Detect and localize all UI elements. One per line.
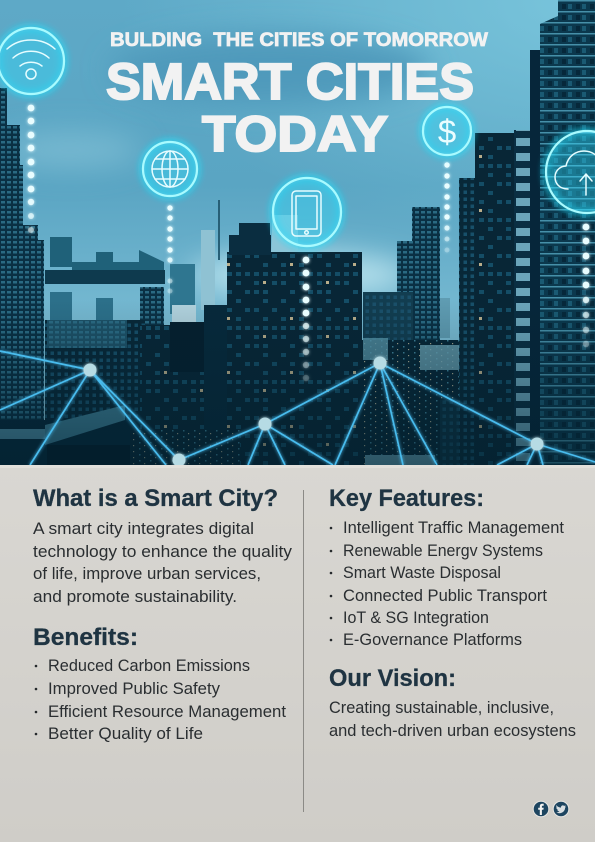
section: what is a smart city <box>33 485 293 606</box>
bullet list <box>35 657 286 743</box>
bullet list: Intelligent Traffic Management <box>343 519 564 537</box>
info panel <box>0 465 595 842</box>
section: benefits <box>33 624 286 743</box>
network lines and nodes <box>0 351 595 466</box>
bullet list: Better Quality of Life <box>48 725 203 743</box>
bullet list: Smart Waste Disposal <box>343 564 501 582</box>
paragraph: A smart city integrates digital <box>33 520 254 538</box>
paragraph <box>329 699 576 740</box>
section: our vision <box>329 665 576 740</box>
heading: Our Vision: <box>329 665 456 692</box>
icon: dollar: $ <box>438 113 456 150</box>
dotted connector lines <box>28 105 589 381</box>
section: key features <box>329 485 564 649</box>
icon: cloud upload <box>546 131 595 213</box>
icon: globe <box>143 142 197 196</box>
icon: wifi <box>0 28 64 94</box>
bullet list: Renewable Energv Systems <box>343 542 543 560</box>
paragraph <box>33 520 293 606</box>
icon: twitter <box>553 801 569 817</box>
paragraph: of life, improve urban services, <box>33 565 261 583</box>
main title line 1: SMART CITIES <box>106 53 474 110</box>
paragraph: Creating sustainable, inclusive, <box>329 699 554 717</box>
bullet list: Efficient Resource Management <box>48 703 286 721</box>
bullet list: IoT & SG Integration <box>343 609 489 627</box>
heading: Benefits: <box>33 624 138 651</box>
paragraph: and tech-driven urban ecosystens <box>329 722 576 740</box>
icon: dollar <box>423 107 471 155</box>
subtitle: BULDING THE CITIES OF TOMORROW <box>110 30 488 51</box>
paragraph: and promote sustainability. <box>33 588 237 606</box>
bullet list <box>330 519 564 649</box>
skyline buildings <box>0 0 595 465</box>
main title line 2: TODAY <box>202 106 388 162</box>
title block <box>106 30 488 162</box>
bullet list: Connected Public Transport <box>343 587 547 605</box>
hero: city skyline photo <box>0 0 595 466</box>
heading: Key Features: <box>329 485 484 512</box>
icon: facebook <box>533 801 549 817</box>
bullet list: Improved Public Safety <box>48 680 221 698</box>
icon: tablet <box>273 178 341 246</box>
paragraph: technology to enhance the quality <box>33 543 293 561</box>
bullet list: E-Governance Platforms <box>343 631 522 649</box>
bullet list: Reduced Carbon Emissions <box>48 657 250 675</box>
heading: What is a Smart City? <box>33 485 278 512</box>
